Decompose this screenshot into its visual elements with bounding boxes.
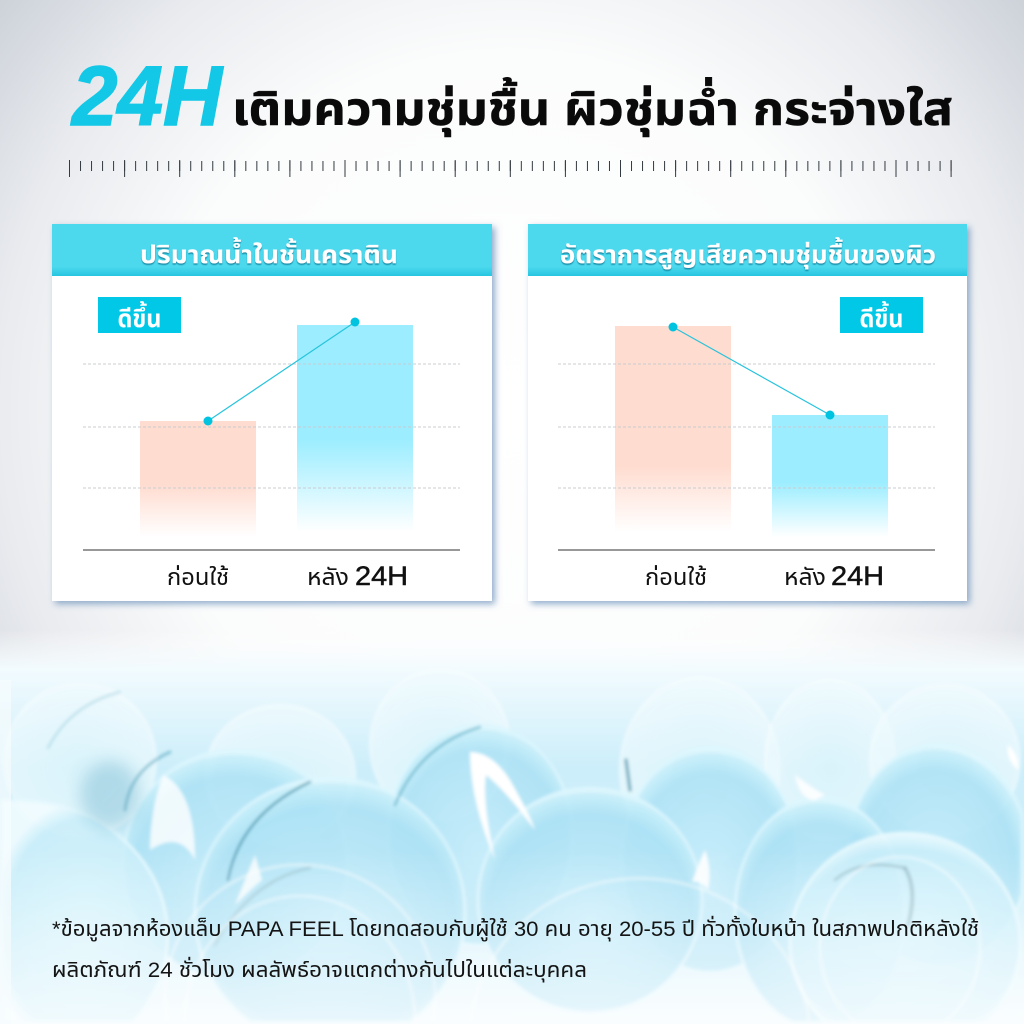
panel card xyxy=(52,224,492,601)
panel header xyxy=(52,224,492,276)
trend line with dots xyxy=(668,322,834,420)
badge: better xyxy=(98,297,181,333)
panel: skin moisture loss rate xyxy=(528,224,967,601)
label: after 24H: หลัง xyxy=(784,564,826,590)
badge: better: ดีขึ้น xyxy=(118,301,162,333)
panel heading: ปริมาณน้ำในชั้นเคราติน xyxy=(140,237,398,269)
title accent: 24H: 24H xyxy=(70,49,224,143)
title text: เติมความชุ่มชื้น ผิวชุ่มฉ่ำ กระจ่างใส xyxy=(232,77,953,137)
footnote: *ข้อมูลจากห้องแล็บ PAPA FEEL โดยทดสอบกับผู้ใช้ 30 คน อายุ 20-55 ปี ทั่วทั้งใบหน้า ในสภาพปกติหลังใช้ xyxy=(52,915,979,942)
badge: better: ดีขึ้น xyxy=(860,301,904,333)
bar: after 24H xyxy=(297,325,413,532)
label: after 24H xyxy=(784,561,884,591)
label: after 24H: หลัง xyxy=(307,564,349,590)
label: after 24H xyxy=(307,561,408,591)
grid lines xyxy=(558,364,935,488)
label: after 24H: 24H xyxy=(355,561,408,591)
bar: before use xyxy=(615,326,731,532)
title xyxy=(70,49,953,143)
background image: water bubbles xyxy=(0,630,1024,1024)
panel: keratin water content xyxy=(52,224,492,601)
bar: after 24H xyxy=(772,415,888,537)
panel header xyxy=(528,224,967,276)
label: before use: ก่อนใช้ xyxy=(167,564,229,590)
x axis xyxy=(558,549,935,551)
grid lines xyxy=(83,364,460,488)
ruler xyxy=(69,166,952,168)
footnote: ผลิตภัณฑ์ 24 ชั่วโมง ผลลัพธ์อาจแตกต่างกันไปในแต่ละบุคคล xyxy=(52,956,587,983)
panel heading: อัตราการสูญเสียความชุ่มชื้นของผิว xyxy=(560,237,936,270)
panel card xyxy=(528,224,967,601)
bar: before use xyxy=(140,421,256,537)
badge: better xyxy=(840,297,923,333)
footnote xyxy=(52,915,979,983)
label: before use: ก่อนใช้ xyxy=(645,564,707,590)
x axis xyxy=(83,549,460,551)
label: after 24H: 24H xyxy=(831,561,884,591)
trend line with dots xyxy=(204,318,360,426)
